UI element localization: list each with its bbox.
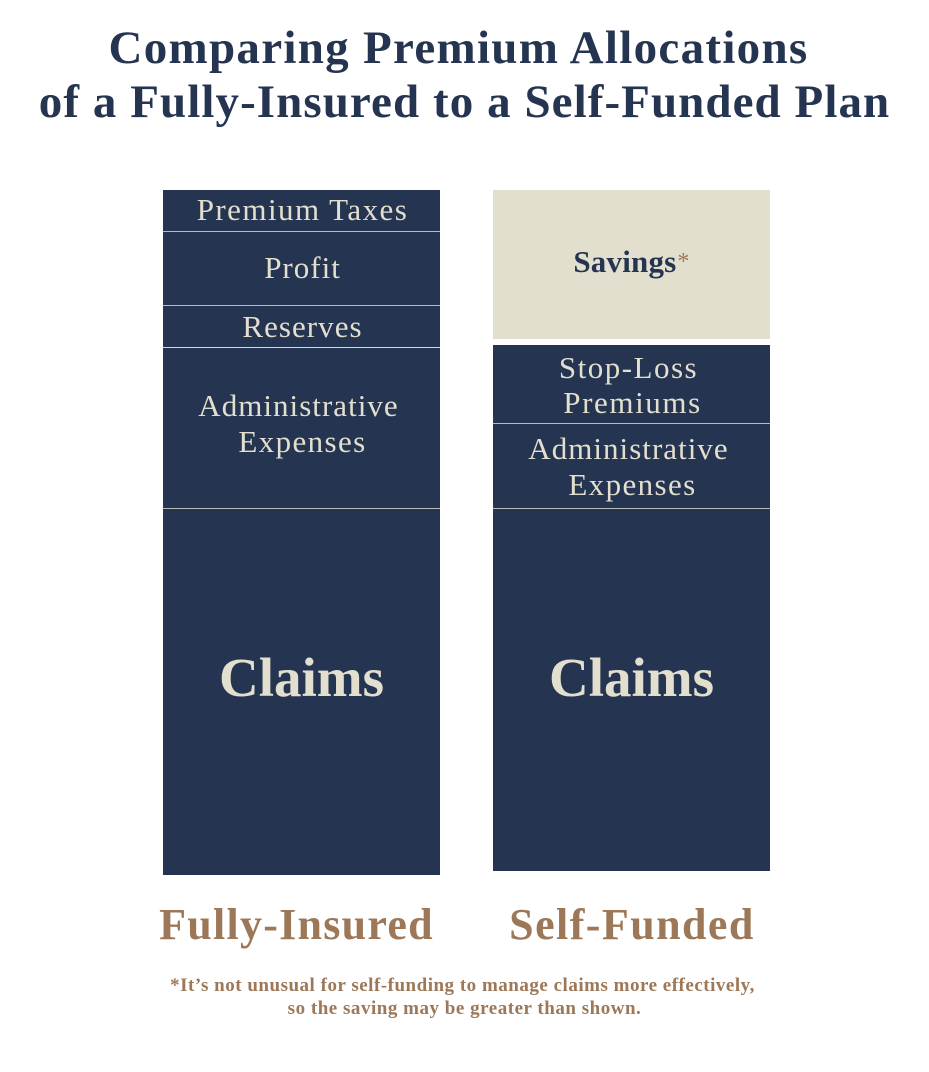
title: of a Fully-Insured to a Self-Funded Plan [39,76,890,128]
label: self-funded: Self-Funded [509,900,755,949]
savings label: Savings* [573,244,690,278]
segment: stop-loss premiums: Premiums [563,384,702,420]
label: fully-insured: Fully-Insured [159,900,434,949]
segment: administrative expenses: Expenses [568,466,697,502]
segment: administrative expenses [528,430,729,502]
segment: administrative expenses: Administrative [528,430,729,466]
segment: stop-loss premiums: Stop-Loss [559,350,698,384]
title [39,22,890,128]
footnote: so the saving may be greater than shown. [288,998,641,1019]
segment: stop-loss premiums [559,350,702,420]
panel: fully-insured column [163,190,440,875]
footnote: *It’s not unusual for self-funding to manage claims more effectively, [170,975,755,996]
segment: administrative expenses: Administrative [198,388,399,422]
segment: claims: Claims [549,647,714,708]
segment: claims: Claims [219,647,384,708]
segment: premium taxes: Premium Taxes [197,192,408,226]
panel: savings [493,190,770,339]
segment: administrative expenses: Expenses [238,424,367,458]
title: Comparing Premium Allocations [108,22,809,74]
segment: reserves: Reserves [242,308,363,344]
panel: self-funded column [493,345,770,871]
footnote [170,975,755,1019]
segment: administrative expenses [198,388,399,458]
segment: profit: Profit [264,250,341,284]
